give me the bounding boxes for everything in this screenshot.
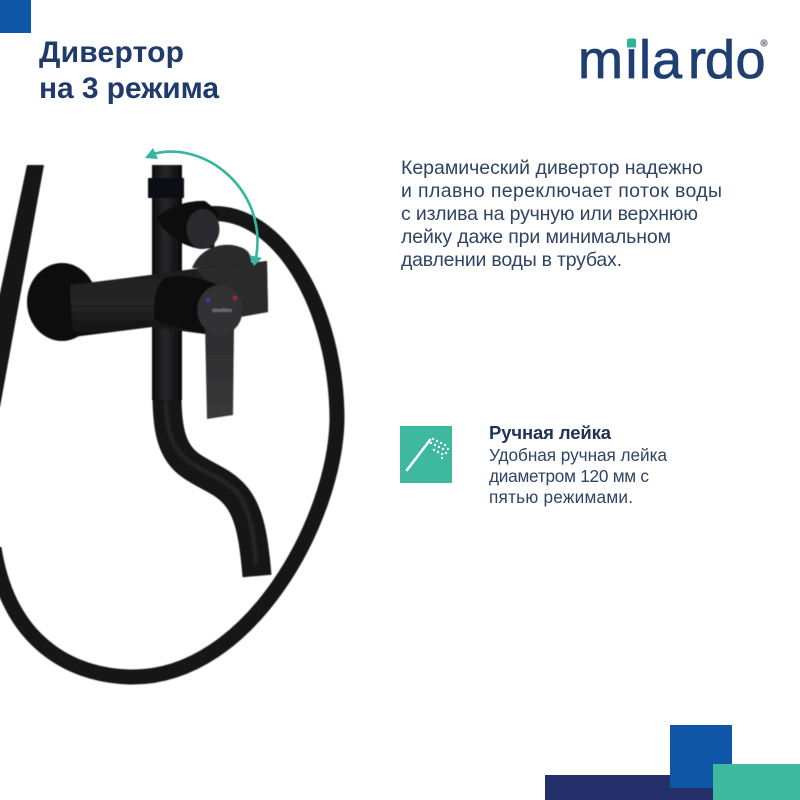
cartridge housing — [154, 276, 222, 334]
mixer illustration — [0, 165, 337, 677]
description text: давлении воды в трубах. — [401, 249, 622, 271]
description text — [401, 157, 722, 271]
rotation arrow — [145, 148, 262, 266]
hose loop — [0, 213, 337, 677]
brand mark: stwellon — [212, 308, 232, 314]
title: на 3 режима — [39, 72, 219, 105]
icon: hand shower — [400, 426, 452, 483]
title: Дивертор — [39, 36, 184, 69]
description text: и плавно переключает поток воды — [401, 180, 722, 202]
feature: hand shower text: Ручная лейка — [489, 422, 612, 443]
top-left corner square — [0, 0, 31, 33]
red indicator — [233, 296, 237, 300]
feature: hand shower text — [489, 422, 667, 507]
description text: Керамический дивертор надежно — [401, 157, 703, 179]
feature: hand shower text: пятью режимами. — [489, 487, 633, 507]
body right facet — [195, 261, 268, 317]
logo registered mark — [761, 40, 767, 46]
lever — [205, 322, 234, 419]
bottom-right corner blocks — [545, 725, 800, 800]
description text: с излива на ручную или верхнюю — [401, 203, 698, 225]
description text: лейку даже при минимальном — [401, 226, 671, 248]
wall flange — [27, 263, 97, 341]
logo accent square — [627, 39, 636, 48]
logo: milardo: milardo — [578, 30, 766, 90]
body end cap — [57, 285, 73, 337]
feature: hand shower text: Удобная ручная лейка — [489, 445, 667, 465]
feature: hand shower text: диаметром 120 мм с — [489, 466, 649, 486]
riser collar — [148, 178, 184, 198]
handle disc — [198, 285, 242, 335]
title — [39, 36, 219, 105]
spout pipe — [167, 395, 257, 576]
escutcheon behind mixer body — [192, 245, 252, 270]
diverter knob — [157, 201, 220, 249]
mixer body — [70, 261, 268, 337]
hand-shower hose left strand — [0, 165, 44, 407]
blue indicator — [206, 298, 210, 302]
riser pipe — [152, 165, 182, 400]
